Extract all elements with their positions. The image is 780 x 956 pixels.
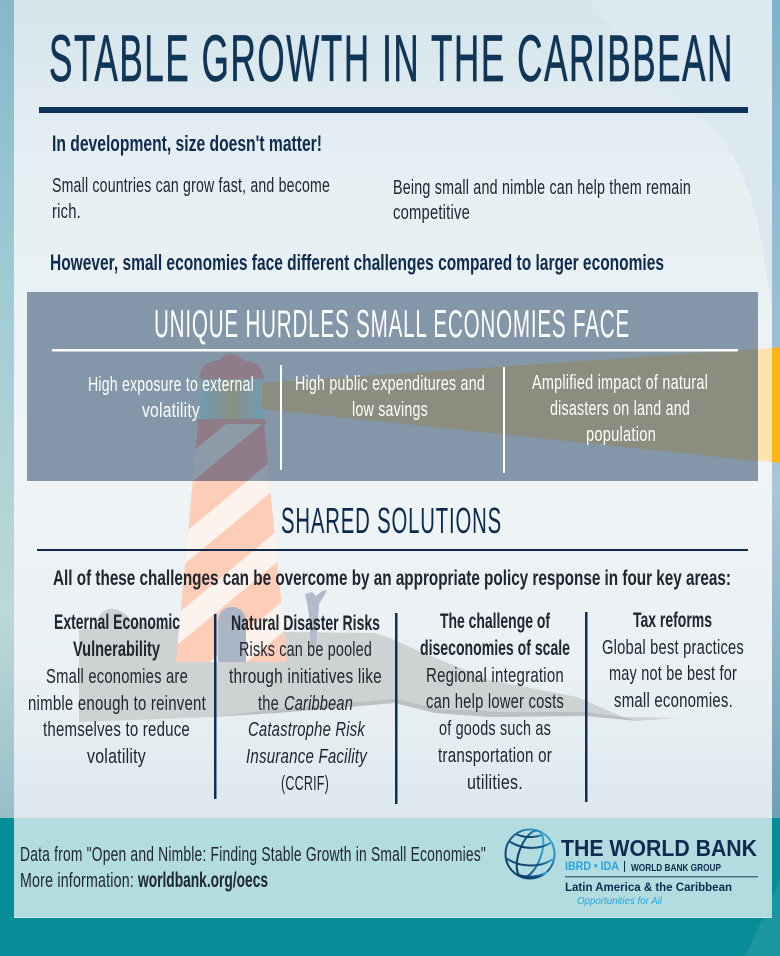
column divider 2 — [395, 613, 398, 804]
column: natural disaster risks: through initiatives like — [229, 665, 382, 688]
logo text: Opportunities for All — [577, 896, 663, 907]
column: external economic vulnerability: nimble enough to reinvent — [28, 692, 206, 715]
column: natural disaster risks: Catastrophe Risk — [248, 718, 366, 741]
column: natural disaster risks: Natural Disaster Risks — [231, 612, 380, 635]
title rule — [39, 107, 748, 113]
intro text: rich. — [52, 200, 81, 223]
solutions rule — [37, 549, 748, 551]
intro text: In development, size doesn't matter! — [52, 131, 322, 156]
column: external economic vulnerability: Small economies are — [46, 665, 188, 688]
lighthouse — [176, 481, 287, 662]
column divider 3 — [585, 612, 588, 802]
column: diseconomies of scale: transportation or — [438, 744, 552, 767]
footer panel — [14, 818, 772, 918]
column: external economic vulnerability: themselves to reduce — [43, 718, 190, 741]
logo text: THE WORLD BANK — [561, 835, 757, 861]
column: external economic vulnerability — [28, 611, 206, 768]
column: natural disaster risks: Caribbean — [284, 692, 353, 715]
intro text: competitive — [393, 201, 470, 224]
column: diseconomies of scale: can help lower costs — [426, 690, 564, 713]
light beam — [262, 347, 780, 463]
column: natural disaster risks: Risks can be pooled — [239, 638, 372, 661]
logo text: WORLD BANK GROUP — [631, 863, 721, 874]
hurdle 1 — [88, 374, 254, 422]
person figure — [305, 590, 327, 648]
hurdle 3: disasters on land and — [550, 398, 690, 420]
column: tax reforms — [602, 609, 744, 712]
heading: shared solutions: SHARED SOLUTIONS — [281, 500, 502, 541]
intro text — [50, 131, 691, 275]
column: external economic vulnerability: Vulnerability — [73, 638, 160, 661]
lighthouse inside panel — [193, 354, 270, 481]
panel: unique hurdles — [27, 292, 758, 481]
hurdle 2: low savings — [352, 399, 428, 421]
hurdle 3: Amplified impact of natural — [532, 372, 708, 394]
source text: worldbank.org/oecs — [137, 869, 268, 892]
source text: Data from "Open and Nimble: Finding Stable Growth in Small Economies" — [20, 843, 486, 866]
column: diseconomies of scale: utilities. — [467, 771, 523, 794]
hurdle 2: High public expenditures and — [295, 373, 485, 395]
column: natural disaster risks: (CCRIF) — [281, 772, 329, 795]
column: natural disaster risks: Insurance Facility — [246, 745, 368, 768]
island — [79, 609, 677, 722]
logo text: IBRD • IDA — [565, 861, 619, 873]
column: tax reforms: Tax reforms — [633, 609, 712, 632]
column: diseconomies of scale — [420, 610, 570, 794]
column: natural disaster risks: the — [258, 692, 279, 715]
column: external economic vulnerability: External Economic — [54, 611, 180, 634]
beam inside panel — [262, 349, 758, 461]
column: diseconomies of scale: Regional integration — [426, 664, 564, 687]
hurdle 1: High exposure to external — [88, 374, 254, 396]
hurdle 3 — [532, 372, 708, 446]
door — [218, 607, 246, 662]
column: natural disaster risks — [229, 612, 382, 795]
logo text — [561, 835, 758, 907]
source text — [20, 843, 486, 892]
hurdle 1: volatility — [142, 400, 200, 422]
column: diseconomies of scale: diseconomies of scale — [420, 637, 570, 660]
icon: world bank globe — [506, 827, 554, 881]
hurdle 3: population — [586, 424, 656, 446]
column: external economic vulnerability: volatility — [87, 745, 146, 768]
logo text: Latin America & the Caribbean — [565, 880, 732, 894]
hurdle 2 — [295, 373, 485, 421]
column: diseconomies of scale: of goods such as — [439, 717, 551, 740]
intro text: Small countries can grow fast, and become — [52, 174, 330, 197]
column divider 1 — [214, 614, 216, 799]
column: tax reforms: small economies. — [614, 689, 733, 712]
column: diseconomies of scale: The challenge of — [440, 610, 551, 633]
source text: More information: — [20, 869, 134, 892]
